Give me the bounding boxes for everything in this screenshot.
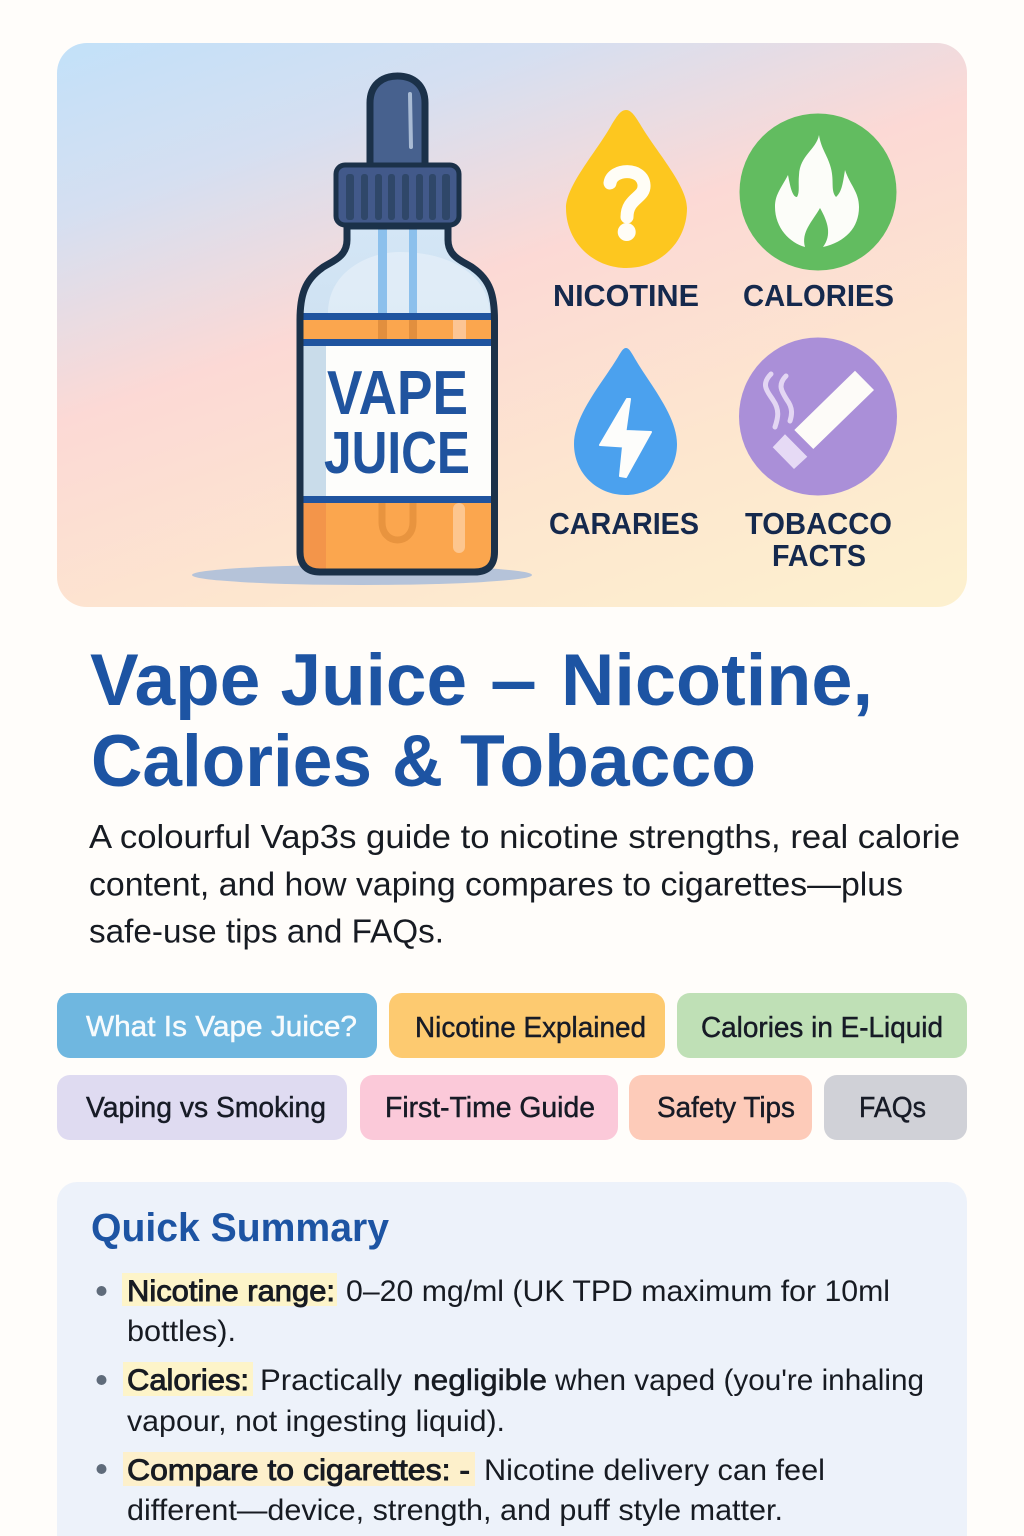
bullet: nicotine range: Nicotine range: [127, 1275, 335, 1308]
chip: vaping vs smoking [57, 1075, 347, 1140]
chip: safety tips [629, 1075, 812, 1140]
intro paragraph: A colourful Vap3s guide to nicotine strengths, real calorie [89, 818, 960, 855]
label: cararies: CARARIES [549, 506, 699, 541]
chip: what is vape juice [57, 993, 377, 1058]
chip: what is vape juice: What Is Vape Juice? [86, 1011, 357, 1043]
intro paragraph [89, 818, 960, 950]
intro paragraph: safe-use tips and FAQs. [89, 912, 444, 950]
title: & [392, 721, 443, 802]
icon: vape juice bottle [296, 76, 499, 574]
bullet: calories: when vaped (you're inhaling [554, 1364, 924, 1397]
label: tobacco facts: FACTS [772, 538, 866, 573]
heading: quick summary: Quick Summary [91, 1206, 390, 1250]
chip: vaping vs smoking: Vaping vs Smoking [86, 1092, 326, 1124]
icon: yellow drop with question mark [566, 110, 687, 268]
title [90, 640, 873, 802]
bullet: compare to cigarettes: Nicotine delivery can feel [484, 1454, 825, 1487]
bullet: compare to cigarettes: Compare to cigarettes: - [127, 1454, 470, 1487]
panel: hero banner [57, 43, 967, 607]
bullet: compare to cigarettes: different—device, strength, and puff style matter. [127, 1494, 783, 1527]
bottle shadow [192, 565, 532, 585]
icon: green circle with flame [740, 114, 896, 270]
bullet: calories: negligible [413, 1364, 547, 1397]
icon: purple circle with cigarette [739, 338, 897, 496]
panel: quick summary [57, 1182, 967, 1536]
label: tobacco facts: TOBACCO [745, 506, 892, 541]
intro paragraph: content, and how vaping compares to cigarettes—plus [89, 866, 903, 902]
bullet: calories: vapour, not ingesting liquid). [127, 1405, 505, 1438]
bullet: nicotine range: bottles). [127, 1315, 236, 1348]
title: Tobacco [460, 721, 756, 802]
title: Nicotine, [561, 640, 873, 721]
bullet: calories [96, 1362, 924, 1438]
bullet: nicotine range [96, 1273, 890, 1348]
chip: faqs: FAQs [859, 1092, 926, 1124]
chip: calories in e-liquid: Calories in E-Liquid [701, 1012, 943, 1044]
icon: blue drop with lightning bolt [574, 348, 677, 495]
title: – [490, 640, 537, 721]
chip: faqs [824, 1075, 967, 1140]
title: Calories [91, 721, 372, 802]
label: nicotine: NICOTINE [553, 278, 699, 313]
chip: nicotine explained [389, 993, 665, 1058]
label: tobacco facts [745, 506, 892, 573]
label: calories: CALORIES [743, 278, 894, 313]
bullet: calories: Practically [260, 1364, 402, 1397]
chip: first-time guide: First-Time Guide [385, 1092, 595, 1124]
title: Vape Juice [90, 640, 467, 721]
bottle label text: VAPE [327, 359, 468, 428]
chip: safety tips: Safety Tips [657, 1092, 795, 1124]
bottle label text [324, 359, 470, 486]
bullet: compare to cigarettes [96, 1452, 825, 1527]
chip: nicotine explained: Nicotine Explained [415, 1012, 646, 1044]
bottle label text: JUICE [324, 420, 470, 486]
bullet: nicotine range: 0–20 mg/ml (UK TPD maximum for 10ml [346, 1275, 890, 1308]
bullet: calories: Calories: [127, 1364, 249, 1397]
chip: first-time guide [360, 1075, 618, 1140]
chip: calories in e-liquid [677, 993, 967, 1058]
